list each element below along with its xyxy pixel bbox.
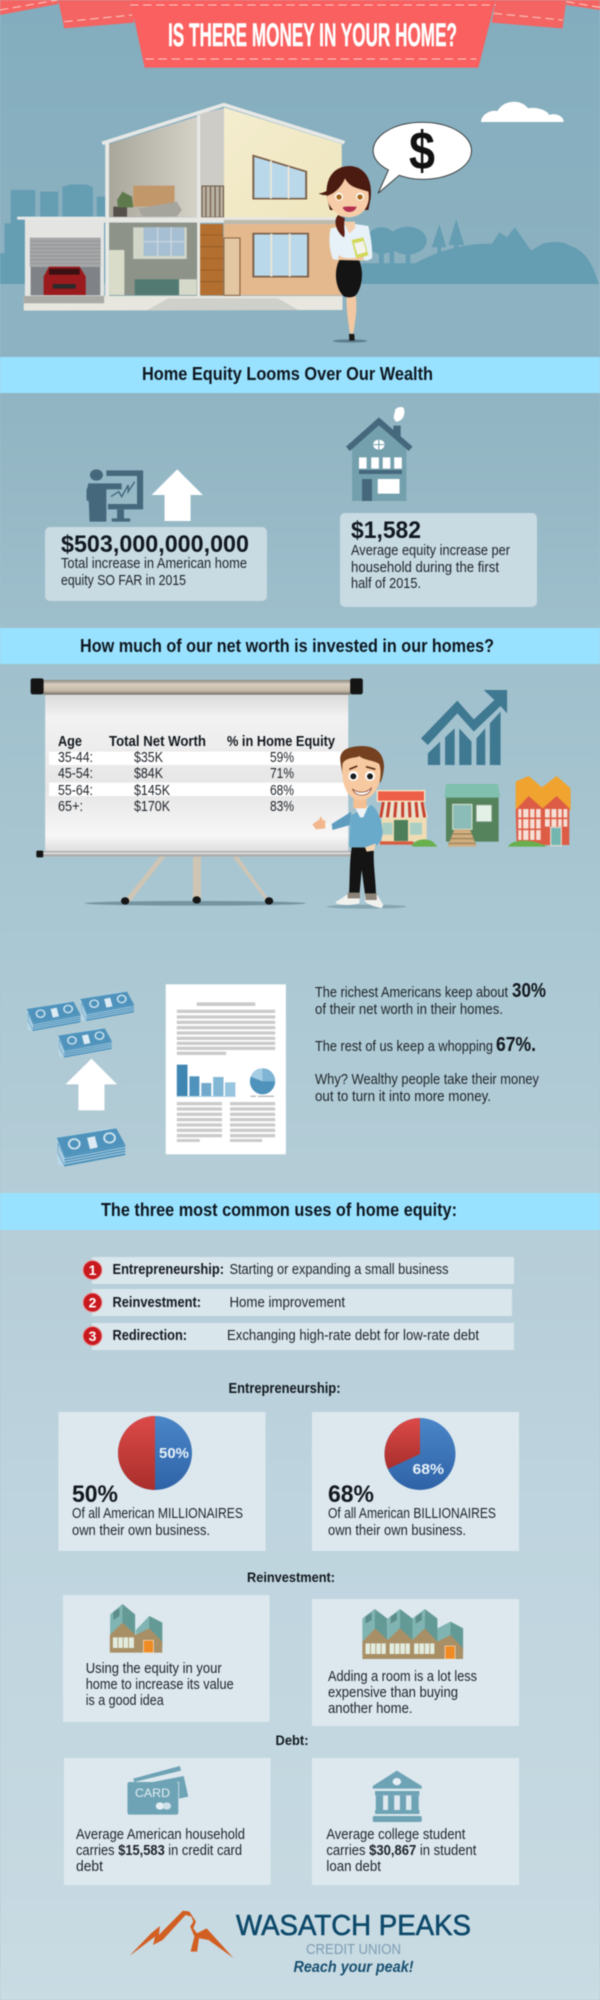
- pie chart 68%: [384, 1418, 456, 1490]
- stat card: total increase: [45, 527, 267, 601]
- card: credit card debt: Average American household: [76, 1827, 245, 1843]
- list item 3: Redirection:: [112, 1328, 187, 1344]
- table header: Age: [58, 733, 82, 750]
- card: adding a room: [312, 1599, 519, 1726]
- card: credit card debt: carries $15,583 in credit card: [76, 1843, 242, 1859]
- card: millionaires: [58, 1412, 266, 1551]
- pie chart 68%: 68%: [412, 1461, 444, 1478]
- card: student loan debt: Average college student: [326, 1827, 465, 1843]
- card: credit card debt: debt: [76, 1859, 103, 1875]
- card: student loan debt: loan debt: [326, 1859, 381, 1875]
- table header: [58, 733, 336, 750]
- icon: green house: [444, 784, 500, 847]
- speech bubble: [373, 121, 471, 193]
- table rows: $84K: [134, 766, 163, 782]
- cloud: [481, 102, 564, 122]
- house lower floor: [103, 217, 343, 296]
- screen: [31, 678, 363, 906]
- woman: [318, 166, 372, 343]
- card: millionaires: Of all American MILLIONAIRES: [72, 1506, 243, 1522]
- icon: rising chart: [421, 690, 507, 765]
- card: billionaires: [312, 1412, 519, 1551]
- table rows: 83%: [270, 799, 294, 815]
- stat card: per household: Average equity increase per: [351, 543, 510, 559]
- text: richest Americans: 67%.: [496, 1034, 536, 1056]
- list item 1: [83, 1257, 514, 1284]
- icon: mountain: [129, 1911, 233, 1958]
- table rows: 71%: [270, 766, 294, 782]
- card: billionaires: own their own business.: [328, 1523, 466, 1539]
- icon: shop: [377, 791, 437, 847]
- panel: projection screen table: [31, 678, 571, 909]
- house: [17, 105, 344, 311]
- list item 2: Home improvement: [230, 1295, 345, 1311]
- table rows: $170K: [134, 799, 170, 815]
- logo: Wasatch Peaks Credit Union: [129, 1910, 471, 1976]
- table rows: 68%: [270, 783, 294, 799]
- hero scene: [0, 0, 600, 358]
- icon: credit card: [127, 1766, 188, 1815]
- table: [58, 733, 336, 815]
- list item 2: Reinvestment:: [112, 1295, 201, 1311]
- card: use equity: is a good idea: [86, 1693, 165, 1709]
- list item 2: [83, 1289, 512, 1316]
- stat card: total increase: Total increase in American home: [61, 556, 247, 572]
- list item 1: Starting or expanding a small business: [230, 1262, 448, 1278]
- logo: Wasatch Peaks Credit Union: WASATCH PEAKS: [236, 1910, 471, 1942]
- upper window: [253, 156, 306, 199]
- table rows: $145K: [134, 783, 170, 799]
- heading: debt: Debt:: [276, 1732, 308, 1748]
- pie chart 50%: 50%: [159, 1445, 189, 1462]
- pie chart 50%: [118, 1416, 192, 1490]
- list item 3: 3: [89, 1328, 97, 1344]
- heading: The three most common uses of home equity:: [101, 1199, 457, 1220]
- card: use equity: [63, 1595, 270, 1722]
- table rows: 59%: [270, 750, 294, 766]
- card: adding a room: expensive than buying: [328, 1685, 458, 1701]
- list item 1: Entrepreneurship:: [112, 1262, 224, 1278]
- stat card: total increase: $503,000,000,000: [61, 531, 249, 558]
- steps and base: [24, 296, 343, 311]
- stat card: total increase: equity SO FAR in 2015: [61, 573, 186, 589]
- card: use equity: Using the equity in your: [86, 1661, 222, 1677]
- icon: house with smoke: [346, 407, 413, 501]
- icon: money stacks: [27, 992, 134, 1166]
- table rows: $35K: [134, 750, 163, 766]
- icon: report document: [166, 984, 286, 1154]
- card: millionaires: own their own business.: [72, 1523, 210, 1539]
- panel: wealth comparison: [27, 980, 546, 1166]
- list item 2: 2: [89, 1294, 97, 1310]
- section band: net worth: [0, 628, 600, 664]
- ground: [0, 284, 600, 358]
- text: richest Americans: out to turn it into more money.: [315, 1089, 491, 1105]
- title ribbon: [0, 0, 600, 68]
- table rows: 55-64:: [58, 783, 93, 799]
- heading: How much of our net worth is invested in our homes?: [80, 635, 494, 656]
- icon: credit card: CARD: [135, 1786, 170, 1800]
- stat card: per household: household during the first: [351, 560, 499, 576]
- list item 3: [83, 1323, 514, 1350]
- table header: Total Net Worth: [109, 733, 206, 750]
- card: billionaires: 68%: [328, 1481, 374, 1508]
- house upper floor: [102, 105, 344, 297]
- icon: up arrow: [152, 469, 203, 521]
- stat card: per household: $1,582: [351, 517, 421, 544]
- card: credit card debt: [64, 1758, 270, 1885]
- icon: up arrow: [65, 1059, 117, 1110]
- text: richest Americans: Why? Wealthy people take their money: [315, 1072, 540, 1088]
- card: billionaires: Of all American BILLIONAIRES: [328, 1506, 496, 1522]
- text: richest Americans: The rest of us keep a whopping: [315, 1039, 493, 1055]
- icon: presenter with chart: [86, 469, 143, 522]
- icon: red townhouses: [508, 776, 571, 847]
- card: student loan debt: carries $30,867 in student: [326, 1843, 476, 1859]
- table rows: 45-54:: [58, 766, 93, 782]
- icon: row of houses: [362, 1609, 463, 1659]
- card: student loan debt: [312, 1758, 519, 1885]
- table header: % in Home Equity: [227, 733, 336, 750]
- table rows: 35-44:: [58, 750, 93, 766]
- section band: home equity: [0, 357, 600, 393]
- card: adding a room: Adding a room is a lot less: [328, 1669, 477, 1685]
- card: adding a room: another home.: [328, 1701, 412, 1717]
- card: millionaires: 50%: [72, 1481, 118, 1508]
- text: richest Americans: The richest Americans keep about: [315, 985, 508, 1001]
- panel: equity stats: [45, 407, 537, 607]
- table rows: [58, 750, 294, 815]
- text: richest Americans: [315, 980, 546, 1105]
- panel: uses list: [83, 1257, 514, 1350]
- heading: reinvestment: Reinvestment:: [247, 1569, 335, 1585]
- heading: Home Equity Looms Over Our Wealth: [142, 363, 433, 384]
- stat card: per household: [340, 513, 537, 607]
- skyline and hills: [0, 184, 599, 284]
- list item 1: 1: [89, 1262, 97, 1278]
- stat card: per household: half of 2015.: [351, 576, 421, 592]
- garage: [17, 217, 104, 296]
- man: [312, 746, 407, 909]
- logo: Wasatch Peaks Credit Union: CREDIT UNION: [306, 1941, 401, 1958]
- heading: entrepreneurship: Entrepreneurship:: [228, 1381, 340, 1397]
- card: use equity: home to increase its value: [86, 1677, 234, 1693]
- section band: three uses: [0, 1193, 600, 1230]
- icon: bank: [373, 1771, 422, 1822]
- list item 3: Exchanging high-rate debt for low-rate debt: [227, 1328, 479, 1344]
- text: richest Americans: of their net worth in their homes.: [315, 1002, 503, 1018]
- dollar sign: $: [409, 121, 435, 181]
- logo: Wasatch Peaks Credit Union: Reach your peak!: [294, 1959, 414, 1976]
- table rows: 65+:: [58, 799, 83, 815]
- icon: small houses: [110, 1604, 162, 1653]
- text: richest Americans: 30%: [512, 980, 546, 1002]
